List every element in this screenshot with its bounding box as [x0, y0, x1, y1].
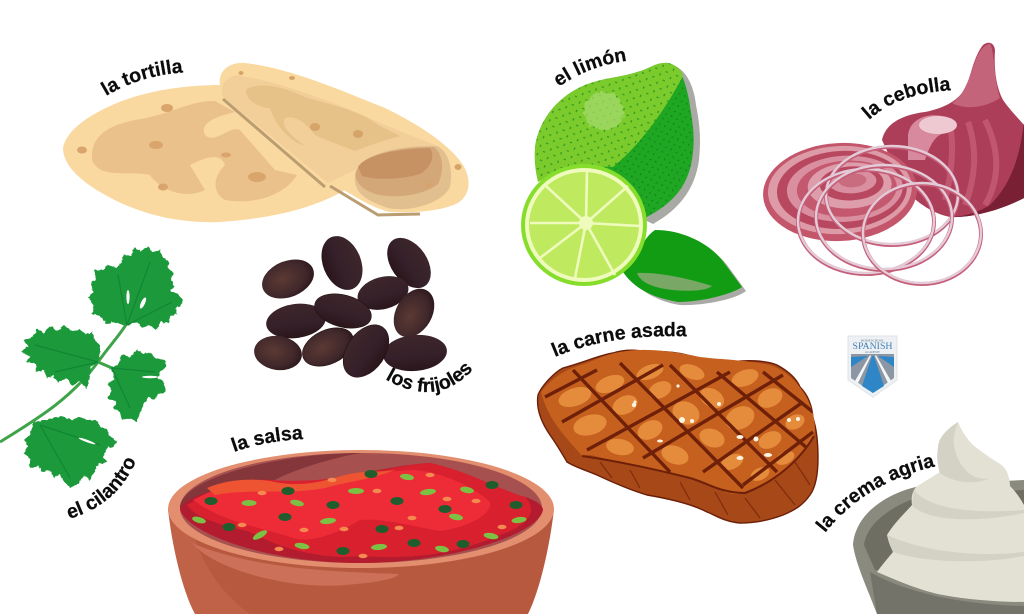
- salsa dark base: [180, 463, 543, 563]
- label: la cebolla: la cebolla: [860, 77, 951, 120]
- salsa orange sauce: [207, 470, 395, 495]
- slice pith: [525, 168, 643, 282]
- label: la tortilla: la tortilla: [100, 60, 184, 96]
- panel: grilled steak: [538, 350, 818, 523]
- steak side: [538, 350, 818, 523]
- leaf shadow: [628, 233, 746, 305]
- steak grill marks: [545, 363, 813, 488]
- light green toppings: [191, 473, 527, 553]
- slice rind: [521, 164, 647, 286]
- toasted patches on flat tortilla: [92, 101, 297, 201]
- dark green toppings: [204, 470, 522, 555]
- salsa mid layer: [187, 463, 531, 557]
- label: la carne asada: la carne asada: [550, 322, 687, 357]
- panel: lime: [521, 63, 746, 305]
- logo school name top: HOMESCHOOL: [861, 338, 884, 342]
- lime stem end: [584, 92, 624, 130]
- whole lime dark side: [535, 63, 694, 218]
- folded tortilla top surface: [222, 75, 437, 183]
- leaf blade: [623, 230, 742, 302]
- cup outer: [853, 480, 1024, 614]
- label: la salsa: la salsa: [230, 427, 304, 452]
- label: el cilantro: el cilantro: [68, 458, 135, 518]
- label: los frijoles: los frijoles: [386, 364, 472, 396]
- logo academy word: ACADEMY: [865, 350, 881, 354]
- cilantro leaf veins: [35, 262, 172, 478]
- leaf worn patch: [637, 273, 712, 291]
- cilantro stem: [0, 323, 127, 442]
- roll opening: [355, 146, 451, 209]
- whole lime light side: [535, 63, 683, 182]
- onion rings: [798, 146, 981, 284]
- bowl inner wall: [180, 453, 542, 563]
- panel: onion: [761, 43, 1024, 284]
- panel: school logo: [848, 336, 897, 397]
- bowl rim: [168, 450, 554, 568]
- lime slice: [521, 164, 647, 286]
- panel: black beans: [252, 230, 448, 386]
- logo rays: [851, 354, 894, 393]
- orange toppings: [238, 473, 506, 558]
- bowl body: [168, 509, 554, 614]
- panel: cilantro: [0, 246, 183, 488]
- onion slice: [761, 139, 919, 245]
- label: la crema agria: la crema agria: [814, 456, 936, 532]
- panel: salsa bowl: [168, 450, 554, 614]
- onion skin streaks: [945, 120, 996, 205]
- fold spots: [238, 71, 462, 188]
- onion neck: [952, 44, 1000, 107]
- salsa bright layer: [193, 470, 490, 539]
- onion dark side: [950, 123, 1024, 217]
- cream shadows: [887, 422, 1024, 561]
- onion bulb: [882, 43, 1024, 217]
- cilantro leaf slits: [78, 290, 158, 445]
- panel: tortilla: [63, 63, 469, 222]
- slice membranes: [530, 170, 640, 278]
- steak side char strokes: [600, 462, 810, 518]
- bowl highlight: [192, 543, 399, 586]
- onion highlight: [908, 115, 955, 160]
- panel: sour cream: [853, 422, 1024, 614]
- slice centre: [579, 216, 593, 230]
- folded tortilla: [220, 63, 469, 212]
- tortilla brown spots: [77, 104, 266, 190]
- cup lower body: [870, 572, 1024, 614]
- cup inner: [864, 490, 1024, 590]
- folded tortilla edge shadow: [223, 99, 420, 215]
- steak highlights: [632, 384, 800, 460]
- slice pulp: [529, 172, 639, 278]
- steak light cells: [556, 361, 807, 484]
- flat tortilla base: [63, 85, 345, 222]
- logo spanish word: SPANISH: [852, 341, 893, 351]
- cilantro leaves: [21, 246, 183, 488]
- lime leaf: [623, 230, 746, 305]
- steak lower char lines: [582, 436, 814, 493]
- bowl left light: [168, 509, 250, 614]
- logo shield: [848, 336, 897, 397]
- label: el limón: el limón: [555, 49, 626, 85]
- toasted patch on fold: [246, 86, 400, 151]
- cream swirl: [877, 422, 1024, 602]
- lime shadow: [538, 64, 700, 224]
- steak top face: [541, 350, 815, 494]
